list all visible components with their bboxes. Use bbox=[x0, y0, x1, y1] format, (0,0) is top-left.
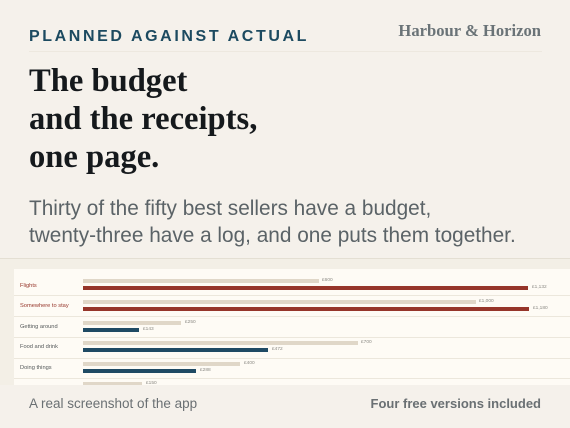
header rule bbox=[29, 51, 542, 52]
subtitle bbox=[29, 197, 516, 247]
value: stay actual: £1,180 bbox=[533, 306, 548, 311]
value: doing things actual: £288 bbox=[200, 368, 211, 373]
bar: getting around planned bbox=[83, 321, 181, 325]
panel: app screenshot bbox=[0, 258, 570, 385]
title: and the receipts, bbox=[29, 101, 257, 137]
value: getting around planned: £250 bbox=[185, 320, 196, 325]
title: The budget bbox=[29, 63, 187, 99]
subtitle: Thirty of the fifty best sellers have a budget, bbox=[29, 197, 431, 220]
bar: flights actual bbox=[83, 286, 528, 290]
eyebrow heading: PLANNED AGAINST ACTUAL bbox=[29, 28, 309, 45]
value: food planned: £700 bbox=[361, 340, 372, 345]
value: food actual: £472 bbox=[272, 347, 283, 352]
bar: clipped next row planned bbox=[83, 382, 142, 386]
brand name: Harbour & Horizon bbox=[398, 21, 541, 40]
label: food and drink: Food and drink bbox=[20, 344, 58, 350]
title bbox=[29, 63, 257, 175]
footer note: left: A real screenshot of the app bbox=[29, 396, 197, 411]
label: getting around: Getting around bbox=[20, 324, 58, 330]
value: flights actual: £1,132 bbox=[532, 285, 547, 290]
bar: stay planned bbox=[83, 300, 476, 304]
chart card: planned against actual bars bbox=[14, 269, 570, 385]
value: getting around actual: £143 bbox=[143, 327, 154, 332]
subtitle: twenty-three have a log, and one puts them together. bbox=[29, 224, 516, 247]
footer note: right: Four free versions included bbox=[370, 396, 541, 411]
bar: doing things actual bbox=[83, 369, 196, 373]
label: doing things: Doing things bbox=[20, 365, 52, 371]
bar: flights planned bbox=[83, 279, 319, 283]
bar: food actual bbox=[83, 348, 268, 352]
bar: food planned bbox=[83, 341, 358, 345]
bar: getting around actual bbox=[83, 328, 139, 332]
value: flights planned: £600 bbox=[322, 278, 333, 283]
label: somewhere to stay: Somewhere to stay bbox=[20, 303, 69, 309]
label: flights: Flights bbox=[20, 283, 37, 289]
title: one page. bbox=[29, 139, 159, 175]
value: stay planned: £1,000 bbox=[479, 299, 494, 304]
value: doing things planned: £400 bbox=[244, 361, 255, 366]
bar: stay actual bbox=[83, 307, 529, 311]
bar: doing things planned bbox=[83, 362, 240, 366]
